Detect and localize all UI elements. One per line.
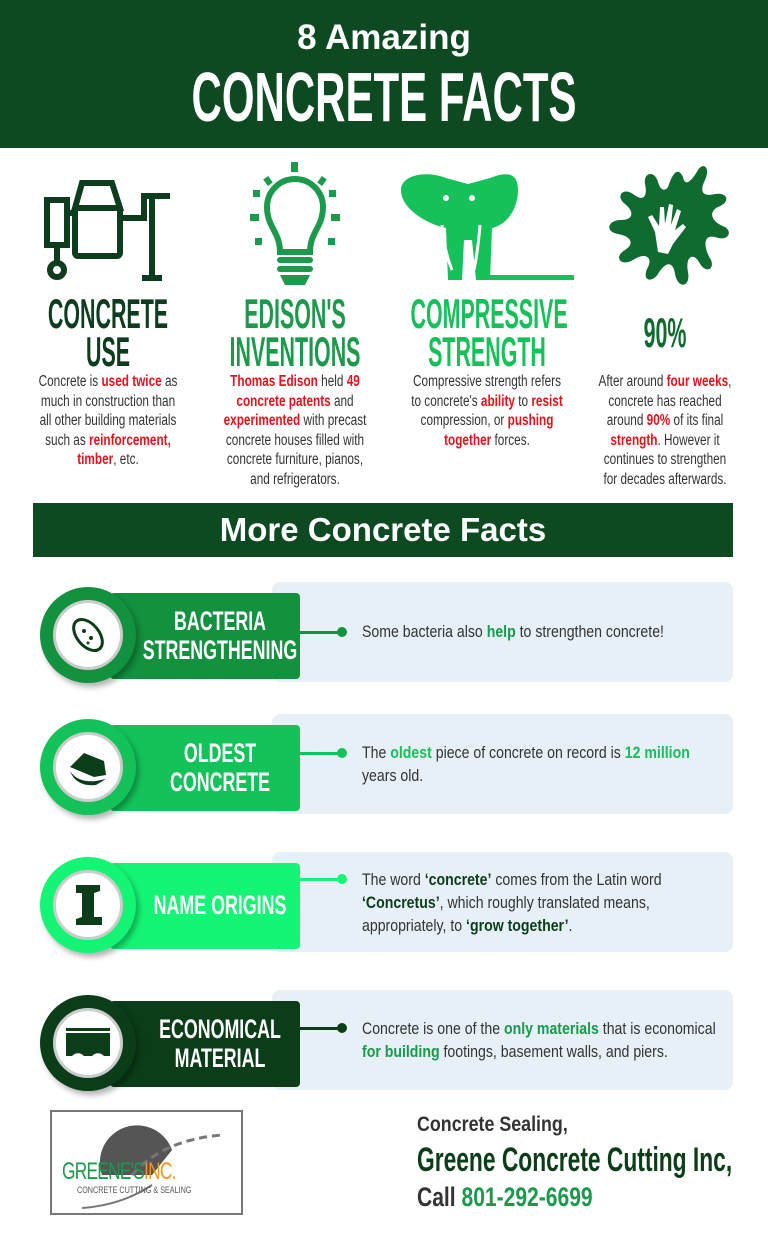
label text: oldest	[170, 738, 270, 797]
text: compressive: Compressive strength refers	[413, 373, 561, 390]
icon: elephant	[401, 174, 574, 280]
title small: 8 Amazing	[297, 18, 471, 57]
text: concrete use	[39, 373, 177, 468]
logo: GREENE'SINC.	[62, 1158, 176, 1185]
text: concrete use: much in construction than	[41, 392, 175, 410]
heading: edison: INVENTIONS	[230, 328, 360, 375]
text: compressive: together forces.	[444, 432, 530, 448]
row: economical	[40, 990, 733, 1098]
contact text: Greene Concrete Cutting Inc,	[417, 1141, 732, 1179]
row: name origins	[40, 852, 733, 960]
text: concrete use: such as reinforcement,	[45, 432, 171, 448]
icon: cement mixer	[44, 180, 170, 281]
heading: concrete use	[48, 290, 168, 375]
text: economical: Concrete is one of the only materials that is economical	[362, 1019, 716, 1038]
text: name origins: appropriately, to ‘grow together’.	[362, 916, 572, 935]
text: concrete use: timber, etc.	[77, 451, 139, 468]
banner: more facts	[33, 503, 733, 557]
label text: bacteria: BACTERIA	[174, 606, 266, 636]
label text: bacteria: STRENGTHENING	[143, 635, 297, 665]
label: economical	[110, 1001, 300, 1087]
text: edison: experimented with precast	[224, 412, 366, 429]
label text: economical: MATERIAL	[175, 1043, 265, 1073]
row: bacteria	[40, 582, 733, 690]
row: oldest	[40, 714, 733, 822]
text: 90: continues to strengthen	[604, 451, 726, 468]
heading: concrete use: CONCRETE	[48, 290, 168, 337]
text: name origins	[362, 870, 662, 935]
contact text: Call 801-292-6699	[417, 1182, 593, 1212]
banner: more facts: More Concrete Facts	[220, 511, 546, 548]
text: 90: for decades afterwards.	[603, 470, 727, 488]
icon: bridge	[40, 995, 136, 1091]
heading: edison: EDISON'S	[244, 290, 346, 337]
title large: CONCRETE FACTS	[191, 58, 577, 136]
text: bacteria: Some bacteria also help to strengthen concrete!	[362, 622, 664, 641]
text: concrete use: Concrete is used twice as	[39, 373, 177, 390]
icon: splat hand	[609, 166, 729, 285]
heading: concrete use: USE	[86, 328, 130, 375]
logo: CONCRETE CUTTING & SEALING	[77, 1185, 191, 1195]
text: edison: and refrigerators.	[250, 470, 340, 488]
label text: bacteria	[143, 606, 297, 665]
header	[0, 0, 768, 148]
text: 90	[598, 373, 731, 488]
heading: compressive: STRENGTH	[428, 328, 546, 375]
heading: edison	[230, 290, 360, 375]
text: 90: After around four weeks,	[599, 373, 731, 390]
text: compressive: compression, or pushing	[421, 412, 553, 429]
label text: economical	[159, 1014, 281, 1073]
label text: oldest: CONCRETE	[170, 767, 270, 797]
text: edison: concrete patents and	[236, 392, 354, 410]
text: edison: Thomas Edison held 49	[230, 373, 360, 390]
heading: 90%: 90%	[644, 309, 686, 356]
label: oldest	[110, 725, 300, 811]
text: economical: for building footings, basement walls, and piers.	[362, 1042, 668, 1061]
text: 90: strength. However it	[610, 432, 720, 448]
label: bacteria	[110, 593, 300, 679]
icon: bacteria	[40, 587, 136, 683]
icon: stone	[40, 719, 136, 815]
text: concrete use: all other building materials	[40, 412, 176, 429]
contact text	[417, 1113, 732, 1212]
text: 90: around 90% of its final	[607, 412, 723, 429]
heading: compressive	[410, 290, 568, 375]
text: name origins: ‘Concretus’, which roughly translated means,	[362, 893, 650, 912]
logo	[50, 1110, 243, 1215]
text: compressive	[411, 373, 563, 448]
text: edison: concrete houses filled with	[226, 432, 364, 448]
label text: economical: ECONOMICAL	[159, 1014, 281, 1044]
label text: oldest: OLDEST	[184, 738, 256, 768]
text: edison	[224, 373, 366, 488]
text: economical	[362, 1019, 716, 1061]
contact text: Concrete Sealing,	[417, 1113, 568, 1136]
label: name origins	[110, 863, 300, 949]
text: oldest: The oldest piece of concrete on record is 12 million	[362, 743, 690, 762]
text: name origins: The word ‘concrete’ comes from the Latin word	[362, 870, 662, 889]
text: edison: concrete furniture, pianos,	[227, 451, 363, 468]
text: compressive: to concrete's ability to resist	[411, 392, 563, 410]
icon: scroll	[40, 857, 136, 953]
text: oldest	[362, 743, 690, 785]
icon: light bulb	[250, 162, 340, 285]
text: oldest: years old.	[362, 766, 423, 785]
heading: compressive: COMPRESSIVE	[410, 290, 568, 337]
text: 90: concrete has reached	[608, 392, 722, 410]
label text: name origins: NAME ORIGINS	[154, 890, 286, 920]
